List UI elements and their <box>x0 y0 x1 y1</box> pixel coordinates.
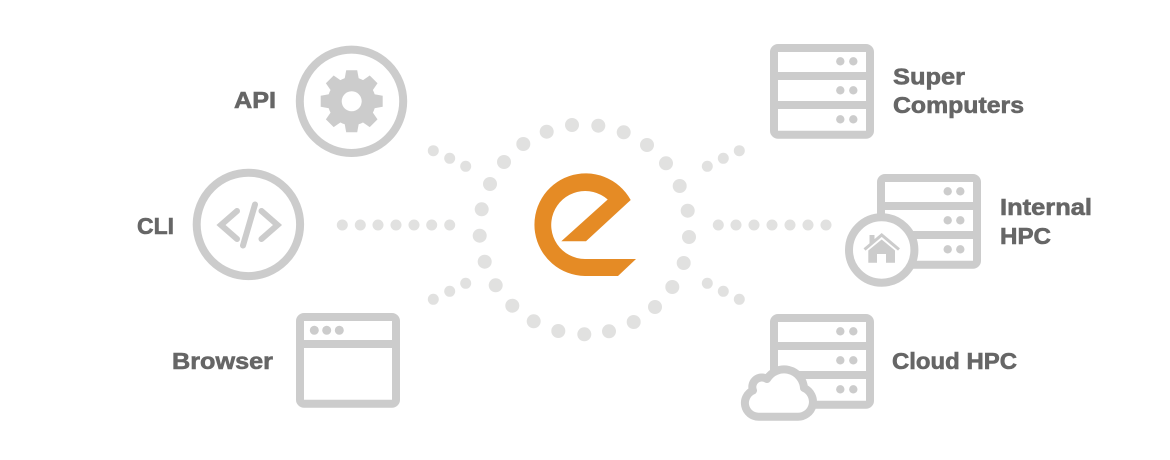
icon: cloud HPC server with cloud <box>745 318 870 417</box>
dotted connector: API <box>428 145 471 172</box>
label: Internal HPC: HPC <box>1000 223 1051 249</box>
icon: super computers server <box>774 48 870 135</box>
label: Cloud HPC: Cloud HPC <box>892 348 1017 374</box>
label: API: API <box>234 87 276 113</box>
label: Internal HPC <box>1000 194 1092 249</box>
dotted ring around logo <box>473 118 696 341</box>
icon: API gear in circle <box>300 50 403 153</box>
dotted connector: Internal HPC <box>713 220 832 230</box>
label: Super Computers: Super <box>893 64 965 90</box>
dotted connector: Super Computers <box>702 145 745 172</box>
icon: browser window <box>300 317 396 404</box>
label: Super Computers <box>893 64 1024 118</box>
label: Internal HPC: Internal <box>1000 194 1092 220</box>
label: CLI: CLI <box>137 213 174 239</box>
icon: CLI code brackets in circle <box>197 173 300 276</box>
label: Browser: Browser <box>172 348 273 374</box>
dotted connector: CLI <box>337 220 455 230</box>
label: Super Computers: Computers <box>893 92 1024 118</box>
dotted connector: Cloud HPC <box>702 278 745 305</box>
orange e logo <box>534 173 636 276</box>
dotted connector: Browser <box>428 278 471 305</box>
icon: internal HPC server with house <box>849 178 977 283</box>
